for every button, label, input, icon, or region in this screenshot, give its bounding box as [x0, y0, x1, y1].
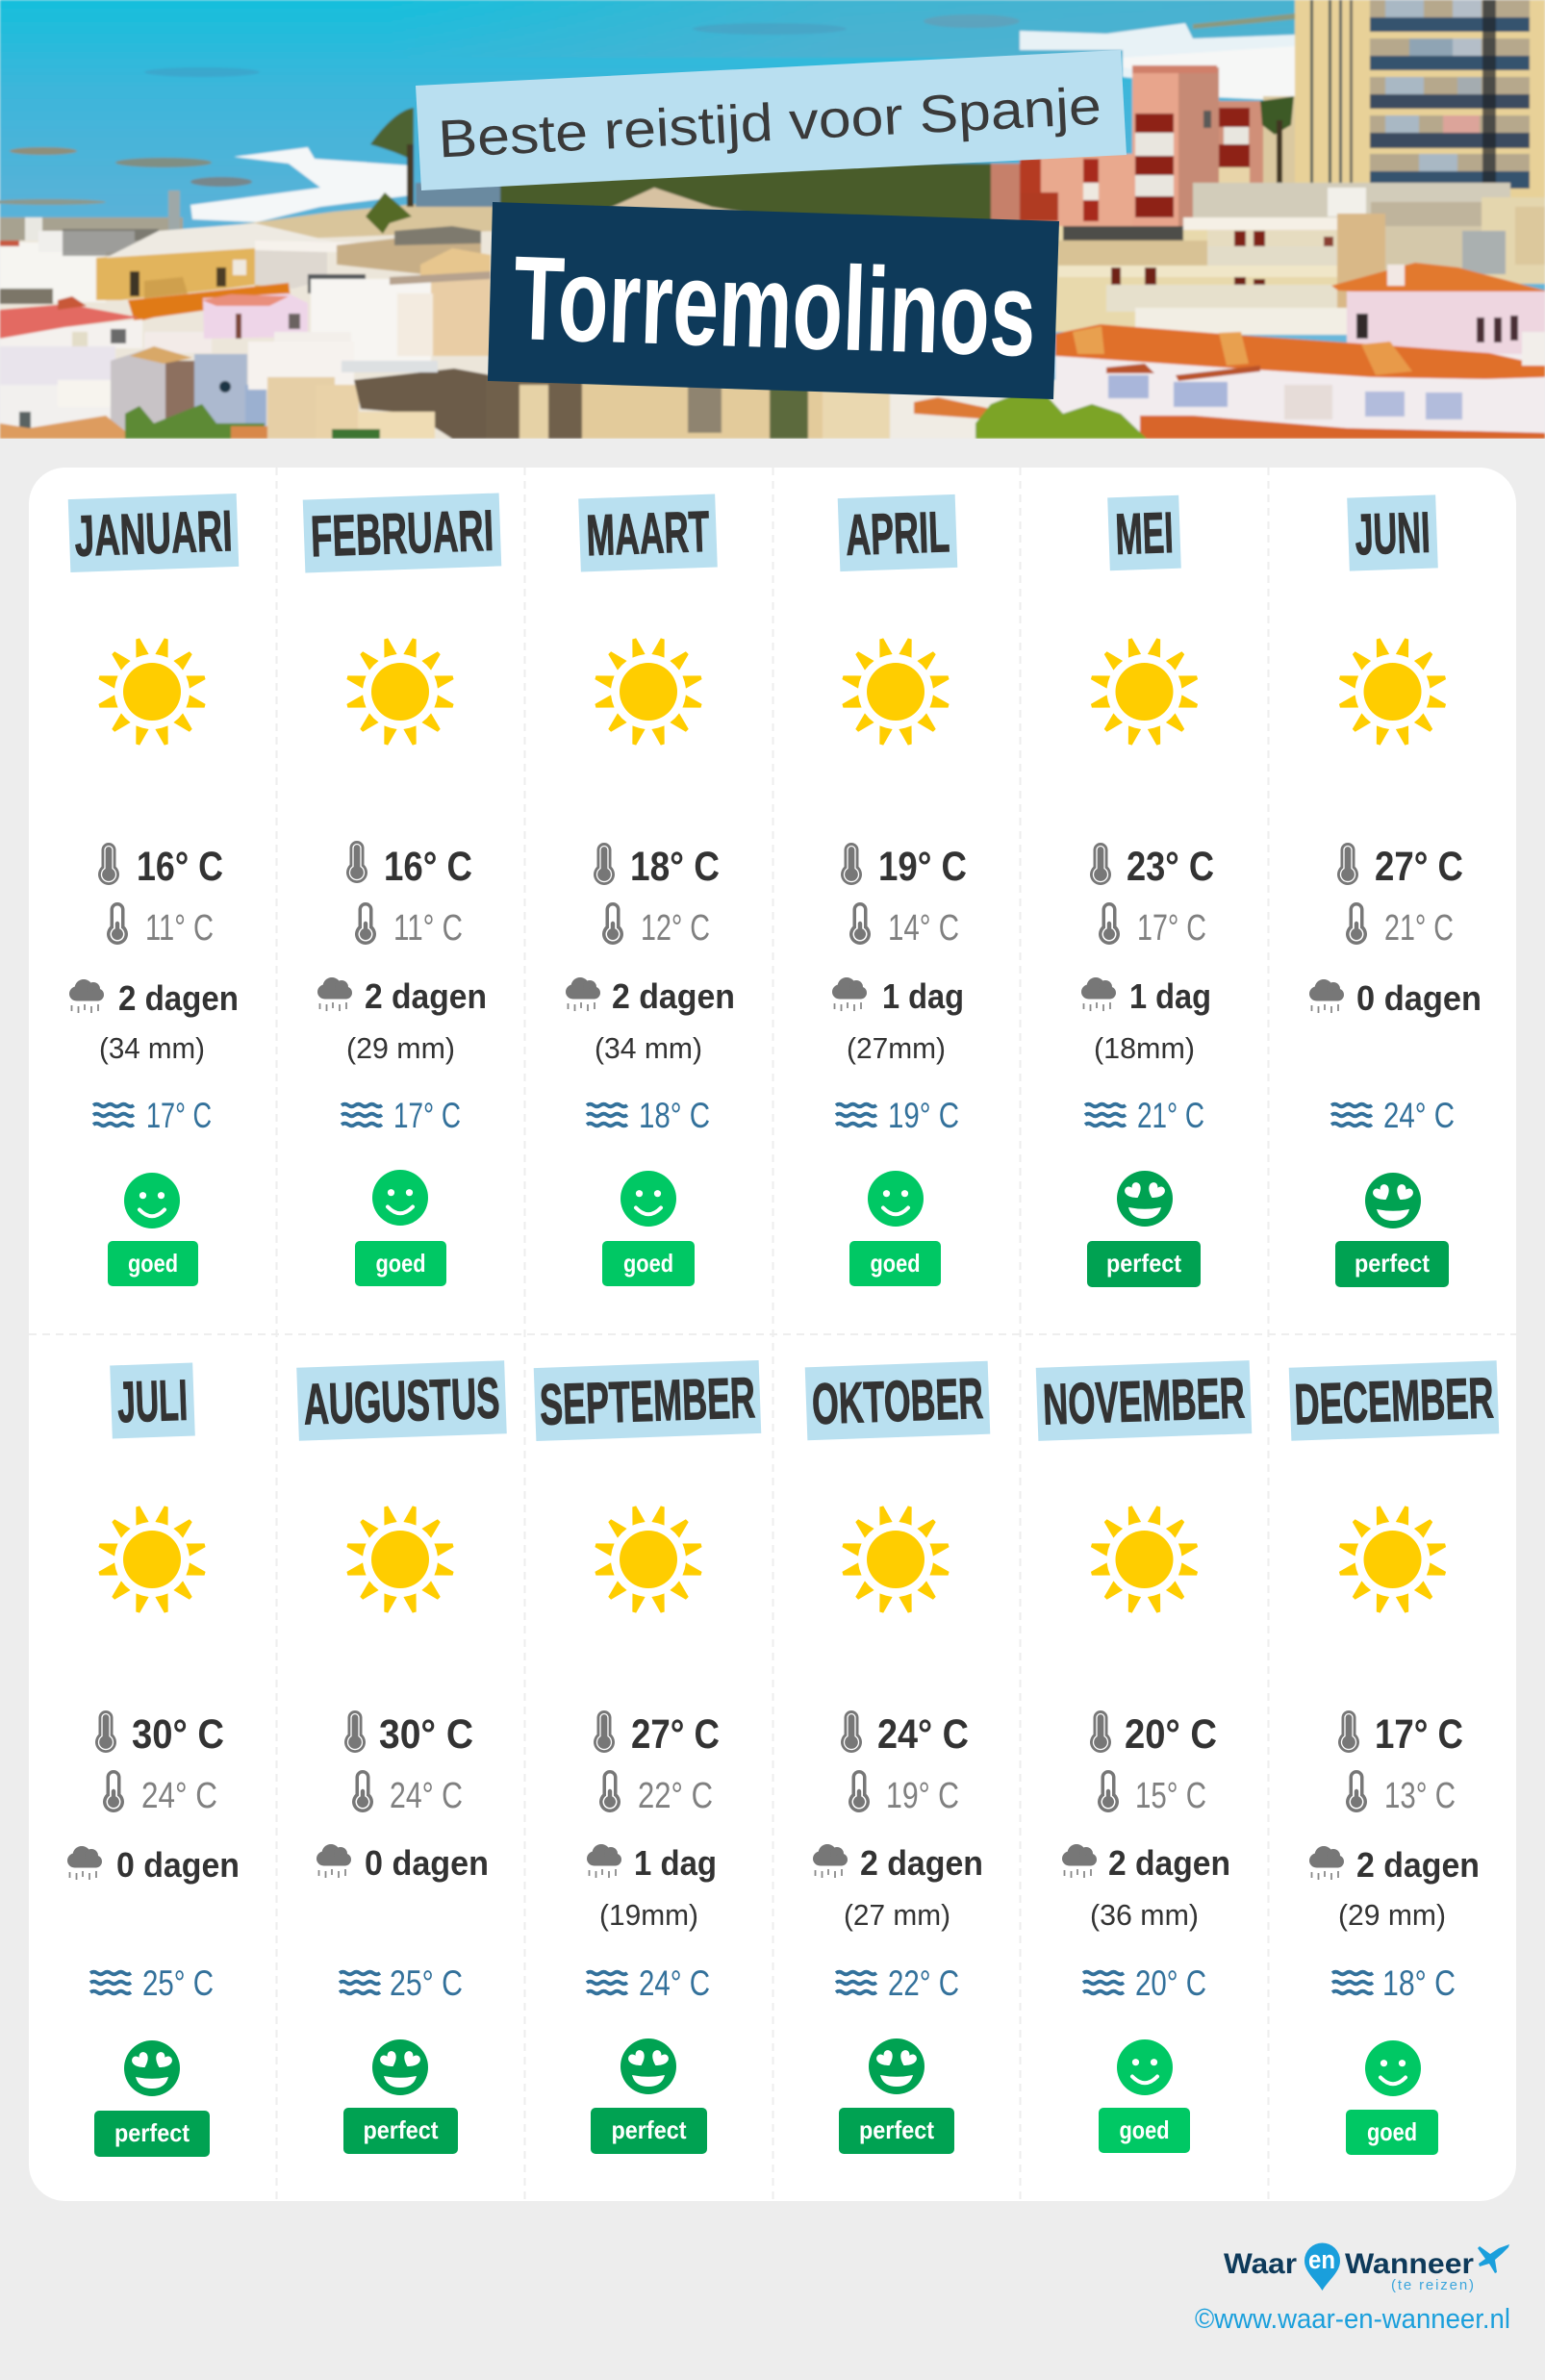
max temperature: 16° C	[384, 844, 472, 890]
icon: sun	[1338, 637, 1447, 747]
month label	[1347, 494, 1438, 571]
icon: sun	[345, 1505, 455, 1614]
max temperature: 17° C	[1375, 1711, 1463, 1758]
icon: airplane	[1478, 2244, 1509, 2273]
month label	[534, 1360, 761, 1441]
icon: sun	[1338, 1505, 1447, 1614]
rainfall: (34 mm)	[99, 1031, 205, 1065]
max temperature	[594, 843, 720, 890]
min temperature	[1099, 902, 1206, 949]
icon: sun	[1090, 1505, 1199, 1614]
icon: smiley	[1365, 1173, 1421, 1228]
rain days	[813, 1843, 983, 1883]
logo: Waar en Wanneer: Wanneer	[1345, 2248, 1474, 2280]
month label: AUGUSTUS	[302, 1365, 501, 1437]
rain days	[1081, 976, 1211, 1016]
rating badge: perfect	[859, 2115, 934, 2144]
palms behind banner	[370, 108, 414, 161]
icon: map pin	[1304, 2243, 1340, 2291]
month label: APRIL	[845, 499, 950, 568]
column: december	[1289, 1360, 1499, 2155]
column: februari	[303, 493, 501, 1286]
max temperature	[1338, 1710, 1463, 1758]
rating badge	[343, 2108, 458, 2154]
sea temperature	[90, 1963, 214, 2003]
rain days	[69, 978, 239, 1018]
max temperature: 16° C	[137, 844, 223, 890]
icon: sun	[97, 637, 207, 747]
icon: sun	[841, 637, 950, 747]
rainfall: (18mm)	[1094, 1031, 1195, 1065]
logo: Waar en Wanneer: (te reizen)	[1391, 2277, 1474, 2293]
icon: sun	[594, 637, 703, 747]
rain days: 2 dagen	[860, 1843, 983, 1883]
rainfall: (36 mm)	[1090, 1898, 1199, 1932]
max temperature: 30° C	[132, 1711, 224, 1758]
column: juli	[67, 1363, 240, 2157]
subtitle banner	[416, 50, 1127, 190]
month label: NOVEMBER	[1042, 1365, 1246, 1437]
icon: smiley	[621, 2038, 676, 2094]
rain days: 2 dagen	[118, 978, 239, 1018]
max temperature: 20° C	[1125, 1711, 1217, 1758]
min temperature	[352, 1770, 463, 1816]
max temperature	[98, 843, 223, 890]
month label	[1036, 1360, 1252, 1441]
photo: Torremolinos coastline	[0, 0, 1545, 439]
rating badge: goed	[1367, 2117, 1417, 2146]
icon: smiley	[1365, 2040, 1421, 2096]
month label	[838, 494, 957, 571]
rating badge	[591, 2108, 707, 2154]
max temperature	[841, 843, 967, 890]
column: april	[832, 494, 967, 1286]
rain days	[587, 1843, 717, 1883]
sea temperature	[836, 1963, 959, 2003]
icon: smiley	[868, 1171, 924, 1227]
sea temperature: 17° C	[393, 1096, 461, 1135]
month label: MAART	[585, 499, 711, 568]
icon: smiley	[869, 2038, 924, 2094]
orange house	[1331, 262, 1545, 292]
column: november	[1036, 1360, 1252, 2153]
sea temperature: 17° C	[146, 1096, 212, 1135]
column: oktober	[805, 1361, 990, 2154]
max temperature	[346, 841, 472, 890]
sea temperature: 24° C	[639, 1963, 710, 2003]
min temperature: 24° C	[141, 1776, 217, 1816]
month label	[110, 1363, 195, 1438]
rating badge: perfect	[364, 2115, 439, 2144]
column: mei	[1081, 495, 1214, 1287]
rating badge: goed	[375, 1249, 425, 1278]
rating badge: perfect	[1106, 1249, 1181, 1278]
column: juni	[1309, 494, 1482, 1287]
beach and palm	[1263, 96, 1295, 192]
rainfall: (29 mm)	[1338, 1898, 1446, 1932]
max temperature	[841, 1710, 969, 1758]
rainfall: (29 mm)	[346, 1031, 455, 1065]
rain days	[1309, 1845, 1480, 1885]
rating badge	[1087, 1241, 1201, 1287]
min temperature: 15° C	[1135, 1776, 1206, 1816]
column: september	[534, 1360, 761, 2154]
month label: OKTOBER	[811, 1366, 984, 1436]
rain days: 1 dag	[634, 1843, 717, 1883]
min temperature	[849, 902, 959, 949]
rainfall: (27mm)	[847, 1031, 946, 1065]
building base	[0, 231, 500, 439]
rating badge	[1335, 1241, 1449, 1287]
min temperature: 13° C	[1384, 1776, 1456, 1816]
sea temperature	[93, 1096, 212, 1135]
center bottom	[580, 384, 823, 439]
rain days: 1 dag	[882, 976, 964, 1016]
rating badge: goed	[623, 1249, 673, 1278]
sand	[244, 202, 493, 239]
min temperature: 17° C	[1137, 908, 1206, 949]
max temperature: 24° C	[877, 1711, 969, 1758]
min temperature	[1098, 1770, 1206, 1816]
rating badge: goed	[128, 1249, 178, 1278]
title banner	[488, 202, 1059, 399]
max temperature: 19° C	[878, 844, 967, 890]
icon: sun	[841, 1505, 950, 1614]
website credit: ©www.waar-en-wanneer.nl	[1195, 2304, 1510, 2335]
min temperature: 11° C	[145, 908, 214, 949]
rating badge: perfect	[612, 2115, 687, 2144]
rain days	[317, 976, 487, 1016]
icon: sun	[345, 637, 455, 747]
sea temperature: 20° C	[1135, 1963, 1206, 2003]
rating badge	[1346, 2110, 1438, 2155]
rating badge: perfect	[1355, 1249, 1430, 1278]
sea temperature	[342, 1096, 461, 1135]
rainfall: (19mm)	[599, 1898, 698, 1932]
rainfall: (34 mm)	[595, 1031, 702, 1065]
min temperature: 21° C	[1384, 908, 1454, 949]
rating badge	[602, 1241, 695, 1286]
icon: smiley	[372, 1170, 428, 1226]
icon: smiley	[1117, 1171, 1173, 1227]
month label: SEPTEMBER	[539, 1365, 756, 1437]
icon: smiley	[124, 2040, 180, 2096]
rain days: 0 dagen	[116, 1845, 240, 1885]
title banner: Torremolinos	[512, 232, 1038, 382]
panel: calendar card	[29, 468, 1516, 2201]
max temperature	[594, 1710, 720, 1758]
max temperature	[1337, 843, 1463, 890]
sea temperature: 18° C	[1382, 1963, 1456, 2003]
month label	[805, 1361, 990, 1440]
sea temperature	[1331, 1096, 1455, 1135]
icon: smiley	[124, 1173, 180, 1228]
rain days: 1 dag	[1129, 976, 1211, 1016]
month label: JUNI	[1354, 500, 1431, 567]
sea temperature: 25° C	[390, 1963, 463, 2003]
min temperature	[103, 1770, 217, 1816]
month label: MEI	[1114, 500, 1175, 567]
min temperature	[107, 902, 214, 949]
rain days	[1062, 1843, 1230, 1883]
max temperature: 27° C	[1375, 844, 1463, 890]
rain days	[832, 976, 964, 1016]
sea temperature: 18° C	[639, 1096, 710, 1135]
month label: JANUARI	[73, 498, 234, 569]
rain days: 2 dagen	[1108, 1843, 1230, 1883]
month label: FEBRUARI	[310, 498, 494, 569]
column: maart	[566, 494, 735, 1286]
min temperature	[355, 902, 463, 949]
sea temperature	[587, 1096, 710, 1135]
column: januari	[68, 494, 239, 1286]
min temperature: 11° C	[393, 908, 463, 949]
rainfall: (27 mm)	[844, 1898, 950, 1932]
white building	[1055, 354, 1545, 439]
sea temperature	[587, 1963, 710, 2003]
sea temperature: 24° C	[1383, 1096, 1455, 1135]
sea temperature: 22° C	[888, 1963, 959, 2003]
sea temperature: 21° C	[1137, 1096, 1204, 1135]
column: augustus	[296, 1360, 507, 2154]
max temperature: 18° C	[630, 844, 720, 890]
sea temperature	[340, 1963, 463, 2003]
icon: smiley	[1117, 2039, 1173, 2095]
month label: JULI	[116, 1368, 189, 1434]
rating badge: goed	[1120, 2115, 1170, 2144]
icon: smiley	[372, 2039, 428, 2095]
icon: sun	[594, 1505, 703, 1614]
rain days: 2 dagen	[1356, 1845, 1480, 1885]
mid building	[1191, 181, 1512, 218]
logo: Waar en Wanneer	[1224, 2243, 1509, 2293]
rating badge	[849, 1241, 941, 1286]
min temperature	[848, 1770, 959, 1816]
max temperature: 23° C	[1127, 844, 1214, 890]
min temperature	[599, 1770, 713, 1816]
month label	[296, 1360, 507, 1441]
max temperature	[95, 1710, 224, 1758]
min temperature: 12° C	[641, 908, 710, 949]
min temperature: 22° C	[638, 1776, 713, 1816]
min temperature: 24° C	[390, 1776, 463, 1816]
max temperature	[1090, 1710, 1217, 1758]
month label	[1107, 495, 1181, 570]
min temperature	[1346, 902, 1454, 949]
max temperature: 27° C	[631, 1711, 720, 1758]
left buildings	[0, 242, 106, 302]
month label	[303, 493, 501, 573]
sea temperature	[836, 1096, 959, 1135]
sea temperature	[1085, 1096, 1204, 1135]
rating badge	[94, 2111, 210, 2157]
rating badge: goed	[870, 1249, 920, 1278]
rating badge: perfect	[114, 2118, 190, 2147]
rain days: 2 dagen	[612, 976, 735, 1016]
pink tower	[1020, 154, 1135, 236]
foam left	[190, 147, 411, 222]
icon: map pin: en	[1308, 2245, 1335, 2274]
month label	[578, 494, 718, 571]
rain days: 0 dagen	[365, 1843, 489, 1883]
logo: Waar en Wanneer: Waar	[1224, 2248, 1297, 2280]
min temperature: 14° C	[888, 908, 959, 949]
min temperature	[602, 902, 710, 949]
icon: sun	[97, 1505, 207, 1614]
month label	[68, 494, 239, 572]
subtitle banner: Beste reistijd voor Spanje	[437, 76, 1102, 168]
min temperature: 19° C	[886, 1776, 959, 1816]
rating badge	[108, 1241, 198, 1286]
rating badge	[1099, 2108, 1190, 2153]
rating badge	[355, 1241, 446, 1286]
sea wall	[0, 217, 183, 241]
rain days: 0 dagen	[1356, 978, 1482, 1018]
sea temperature: 19° C	[888, 1096, 959, 1135]
min temperature	[1346, 1770, 1456, 1816]
sea temperature: 25° C	[142, 1963, 214, 2003]
rain days	[317, 1843, 489, 1883]
icon: smiley	[621, 1171, 676, 1227]
max temperature	[1090, 843, 1214, 890]
high rise	[1295, 0, 1545, 207]
rating badge	[839, 2108, 954, 2154]
rain days	[67, 1845, 240, 1885]
max temperature: 30° C	[379, 1711, 473, 1758]
rain days: 2 dagen	[365, 976, 487, 1016]
rain days	[566, 976, 735, 1016]
icon: sun	[1090, 637, 1199, 747]
max temperature	[344, 1710, 473, 1758]
sea temperature	[1332, 1963, 1456, 2003]
sea temperature	[1083, 1963, 1206, 2003]
